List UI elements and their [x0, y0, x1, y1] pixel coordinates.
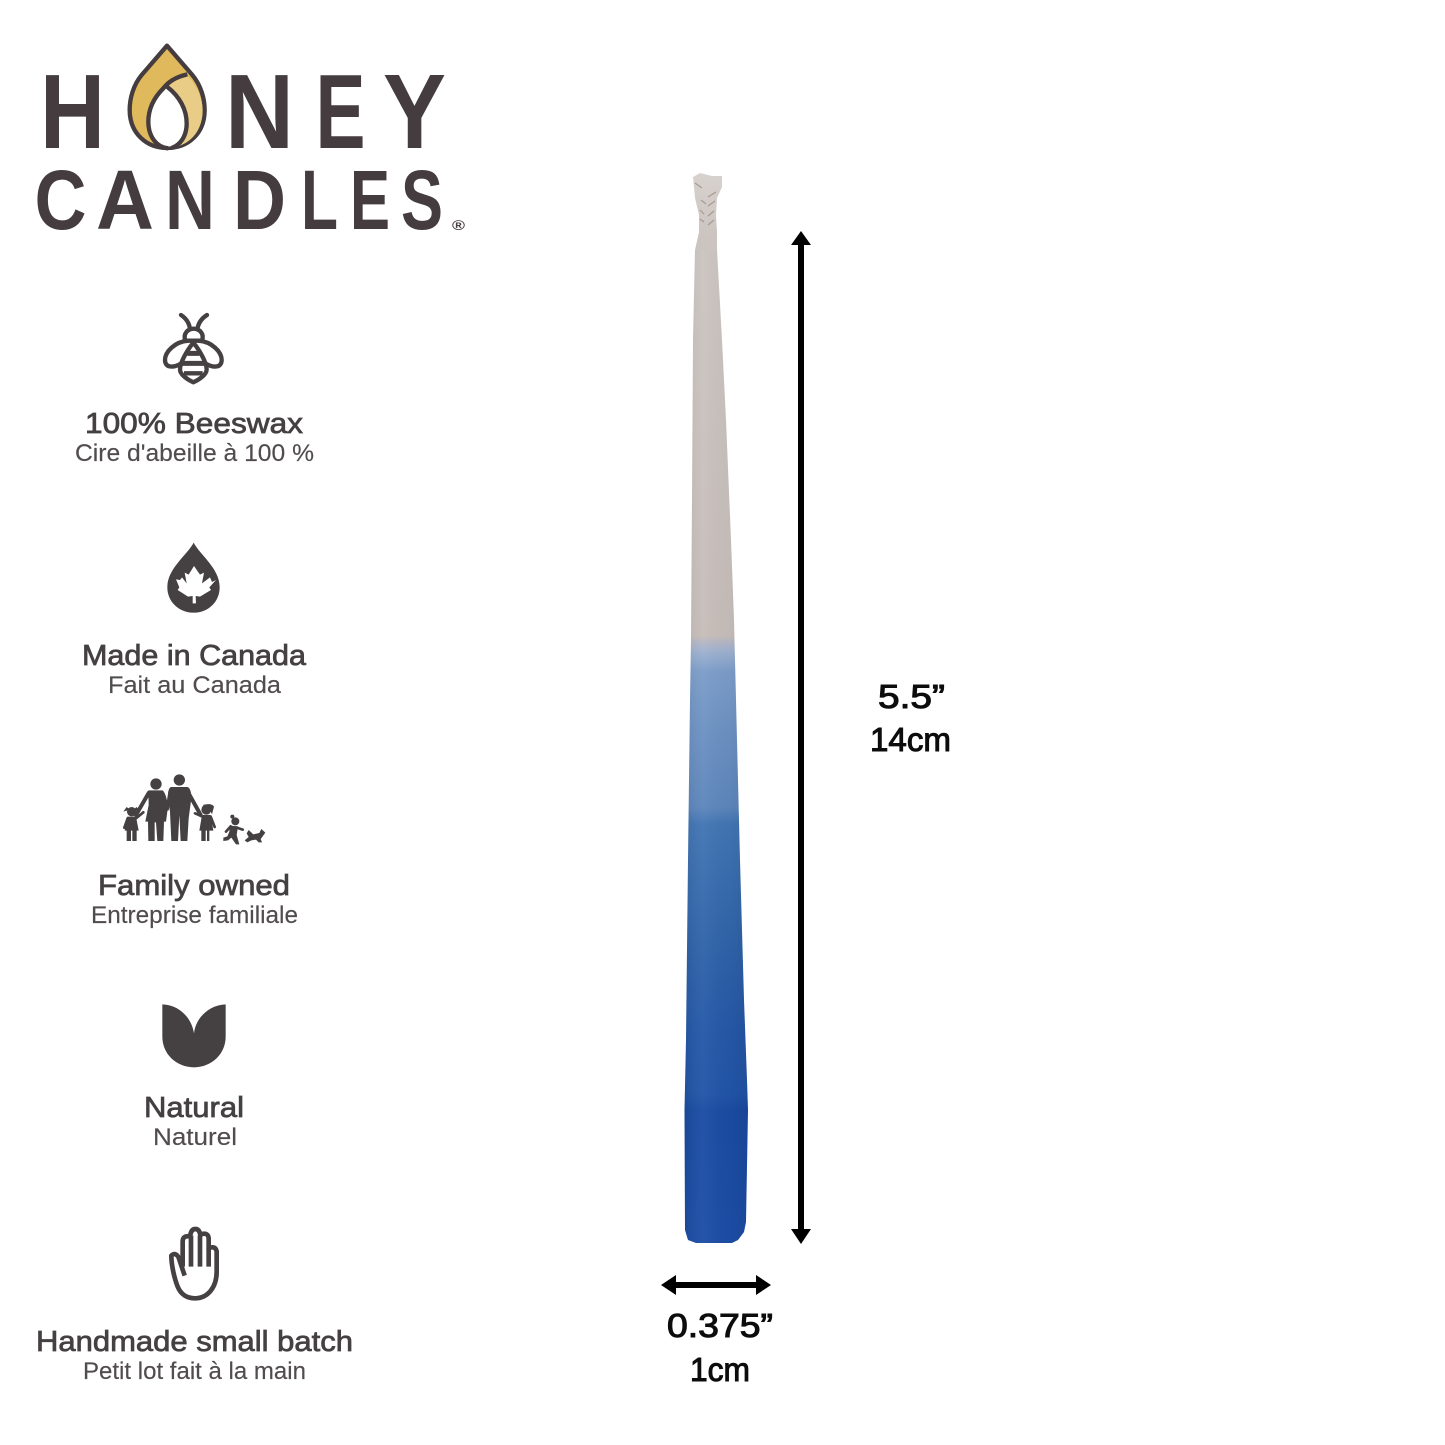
logo word: HONEY: Y: [383, 53, 446, 171]
label: width: 1cm: [690, 1351, 750, 1388]
heading: Made in Canada: Made in Canada: [82, 640, 307, 672]
label: width: [667, 1307, 773, 1388]
subheading: Naturel: Naturel: [153, 1124, 237, 1151]
subheading: Petit lot fait à la main: Petit lot fait à la main: [83, 1358, 306, 1385]
logo word: CANDLES: N: [165, 153, 215, 247]
label: height: [870, 678, 951, 758]
candle wick braid: [695, 183, 716, 225]
feature: Family owned: [91, 774, 298, 929]
arrow: width dimension: [661, 1275, 771, 1295]
heading: Natural: Natural: [144, 1092, 244, 1124]
logo: Honey Candles: [34, 46, 466, 247]
registered mark: ®: [452, 217, 466, 233]
icon: open hand: [171, 1229, 217, 1298]
label: height: 14cm: [870, 721, 951, 758]
icon: maple leaf drop: [167, 543, 220, 613]
feature: Handmade small batch: [36, 1229, 353, 1385]
logo word: CANDLES: D: [233, 153, 286, 247]
arrow: height dimension: [791, 231, 811, 1244]
subheading: Cire d'abeille: Cire d'abeille à 100 %: [75, 440, 314, 467]
logo word: HONEY: E: [316, 53, 366, 171]
logo flame icon: [130, 46, 205, 148]
logo word: CANDLES: [34, 153, 443, 247]
logo word: CANDLES: L: [301, 153, 338, 247]
candle photo: [684, 173, 748, 1243]
logo word: HONEY: [40, 53, 446, 171]
logo word: CANDLES: A: [96, 153, 154, 247]
logo word: HONEY: H: [40, 53, 105, 171]
logo word: CANDLES: E: [350, 153, 390, 247]
feature: Natural: [144, 1004, 244, 1151]
candle body: [684, 173, 748, 1243]
heading: Handmade small batch: Handmade small batch: [36, 1326, 353, 1358]
label: height: 5.5”: [878, 678, 945, 715]
label: width: 0.375”: [667, 1307, 773, 1344]
subheading: Fait au Canada: Fait au Canada: [108, 672, 282, 699]
candle shading: [684, 250, 748, 1243]
heading: Family owned: Family owned: [98, 870, 290, 902]
feature: Made in Canada: [82, 543, 307, 699]
feature: 100% Beeswax: [75, 315, 314, 467]
logo word: HONEY: N: [225, 53, 294, 171]
icon: bee: [165, 315, 222, 382]
logo word: CANDLES: S: [401, 153, 443, 247]
logo word: CANDLES: C: [34, 153, 86, 247]
heading: 100% Beeswax: 100% Beeswax: [85, 408, 304, 440]
subheading: Entreprise familiale: Entreprise familiale: [91, 902, 298, 929]
icon: tulip leaf: [162, 1004, 226, 1067]
icon: family silhouettes: [123, 774, 265, 844]
